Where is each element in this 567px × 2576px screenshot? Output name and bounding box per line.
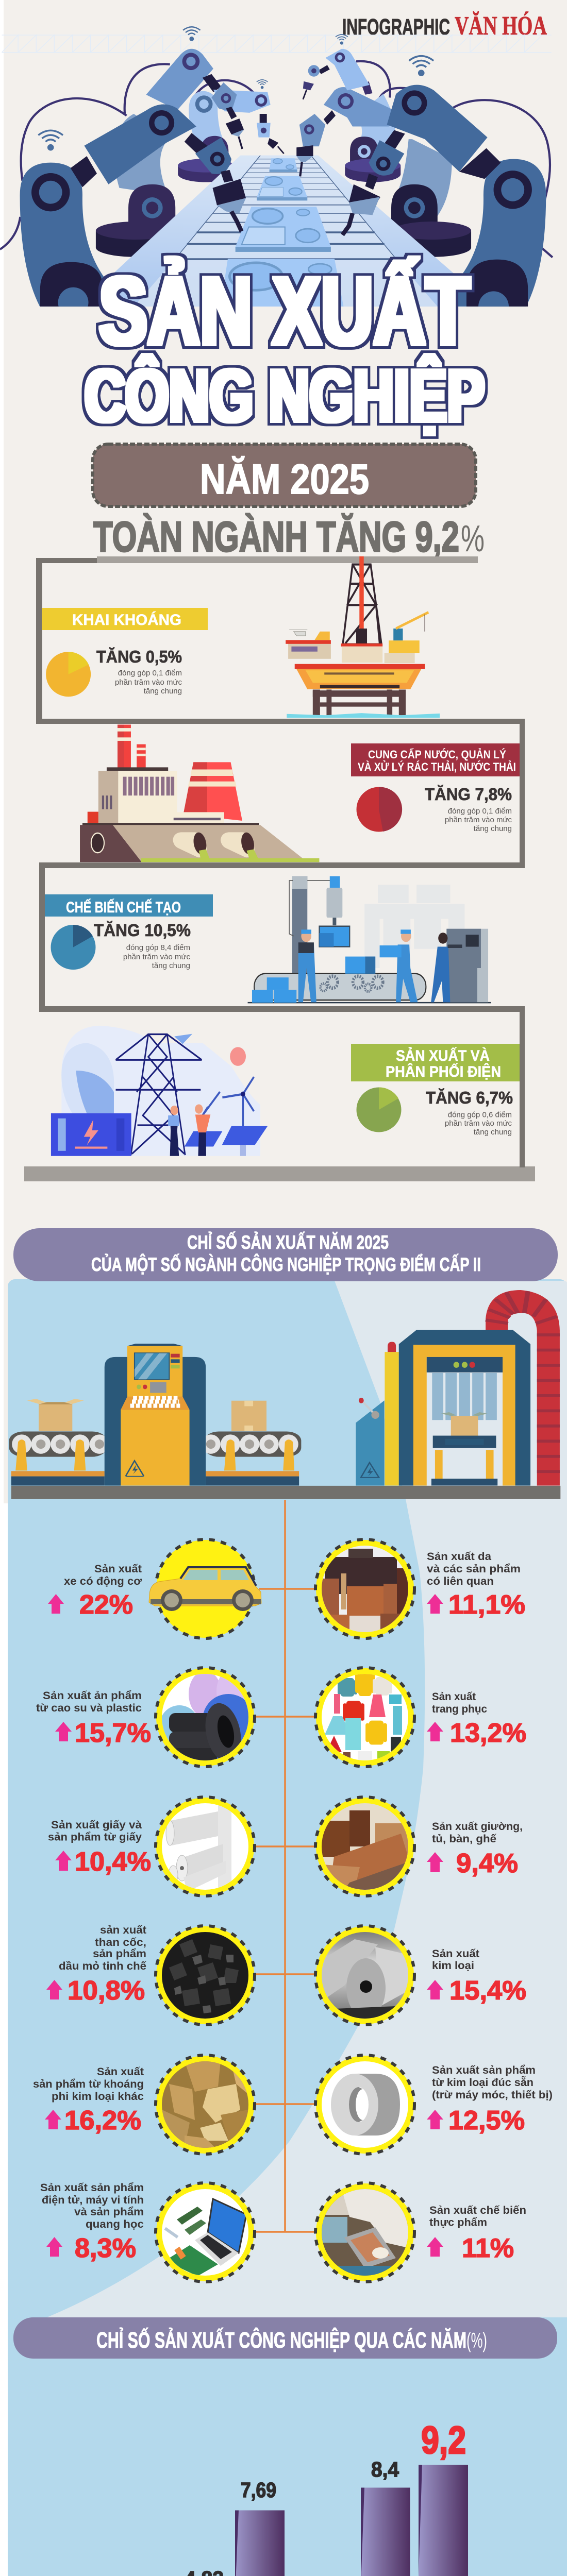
photo substitute: food factory [322, 2189, 408, 2279]
item: coke and petroleum [46, 1924, 255, 2025]
item: non-metallic minerals: 16,2% [64, 2106, 141, 2136]
photo substitute: metal rolls [322, 1932, 408, 2019]
item: furniture: tủ, bàn, ghế [432, 1833, 496, 1845]
stat: mining: đóng góp 0,1 điểm [118, 669, 182, 677]
left conveyor [9, 1432, 301, 1485]
panel: water and waste [80, 724, 520, 862]
stat: electricity [426, 1088, 513, 1137]
bar 2022: 7,69 [241, 2478, 276, 2502]
photo substitute: coal [162, 1932, 248, 2019]
stat: mining: TĂNG 0,5% [96, 647, 182, 666]
item: furniture: 9,4% [456, 1849, 518, 1878]
panel: manufacturing [45, 876, 491, 1003]
photo substitute: clothes [322, 1674, 408, 1760]
item: electronics: 8,3% [75, 2233, 136, 2263]
hero illustration: robot arms over a conveyor [0, 27, 553, 307]
item: non-metallic minerals: phi kim loại khác [52, 2091, 144, 2103]
item: leather: có liên quan [427, 1575, 494, 1587]
photo substitute: paper rolls [162, 1803, 248, 1892]
item: non-metallic minerals: sản phẩm từ khoáng [33, 2078, 144, 2090]
header logo: Infographic Văn Hóa: INFOGRAPHIC [342, 14, 450, 40]
item: coke and petroleum: sản xuất [100, 1924, 146, 1936]
label: mining [42, 608, 208, 630]
bar chart: yearly production index [120, 2418, 468, 2576]
text: xe có động cơ [64, 1575, 142, 1587]
illustration: factory machines on floor [9, 1290, 560, 1499]
heading: 2025 production index: CHỈ SỐ SẢN XUẤT NĂM 2025 [187, 1231, 389, 1253]
text [48, 1563, 142, 1620]
item: electronics: quang học [86, 2218, 144, 2230]
item: paper: Sản xuất giấy và [51, 1819, 142, 1831]
pie: manufacturing [51, 925, 96, 970]
stat: mining: tăng chung [144, 687, 182, 696]
item: rubber and plastic: từ cao su và plastic [36, 1702, 142, 1714]
item: paper [48, 1797, 255, 1896]
stat: electricity: TĂNG 6,7% [426, 1088, 513, 1107]
stair frame [24, 556, 535, 1181]
bar 2025 [419, 2418, 468, 2576]
item: electronics: và sản phẩm [74, 2206, 144, 2218]
item: fabricated metal [315, 2055, 553, 2154]
label: electricity [351, 1044, 520, 1081]
control machine [105, 1344, 206, 1485]
label: water and waste [351, 743, 520, 776]
item: coke and petroleum: dầu mỏ tinh chế [59, 1960, 146, 1972]
stat: mining [96, 647, 182, 696]
item: electronics: điện tử, máy vi tính [42, 2194, 144, 2206]
ceiling truss [2, 35, 552, 53]
icon: factory [80, 724, 319, 862]
item: metals [315, 1926, 526, 2025]
heading: 2025 production index [13, 1228, 558, 1281]
robot cables [0, 61, 553, 257]
text: Sản xuất [94, 1563, 142, 1575]
item: rubber and plastic [36, 1668, 255, 1767]
panel: mining [42, 556, 440, 718]
bar 2022 [235, 2478, 285, 2576]
stat: electricity: phần trăm vào mức [445, 1119, 512, 1128]
top robot tools (centre) [211, 82, 336, 176]
label: manufacturing [45, 894, 213, 917]
floor [11, 1486, 560, 1499]
photo substitute: leather goods [322, 1546, 408, 1632]
label: mining: KHAI KHOÁNG [72, 611, 181, 629]
label: water and waste: CUNG CẤP NƯỚC, QUẢN LÝ [368, 748, 506, 761]
central connector lines [255, 1500, 314, 2232]
item: apparel [315, 1668, 526, 1772]
stat: manufacturing: đóng góp 8,4 điểm [126, 943, 190, 952]
circle [156, 1539, 255, 1638]
item: food processing: thực phẩm [429, 2216, 487, 2229]
pie: water and waste [357, 787, 402, 832]
stat: water and waste [425, 785, 512, 833]
photo substitute: gold ore [162, 2061, 248, 2148]
photo substitute: laptop and circuit board [162, 2189, 248, 2276]
item: electronics [40, 2182, 255, 2282]
item: apparel: Sản xuất [432, 1691, 476, 1703]
item: furniture: Sản xuất giường, [432, 1821, 523, 1833]
item: leather: và các sản phẩm [427, 1563, 521, 1575]
item: metals: 15,4% [449, 1976, 526, 2006]
item: fabricated metal: 12,5% [448, 2106, 525, 2136]
item: rubber and plastic: Sản xuất ản phẩm [43, 1690, 142, 1702]
bar 2024: 8,4 [371, 2458, 399, 2481]
item: coke and petroleum: than cốc, [95, 1937, 146, 1948]
stat: manufacturing: TĂNG 10,5% [94, 921, 191, 940]
photo substitute: steel coil [322, 2061, 408, 2148]
big robot left [20, 104, 246, 307]
item: paper: sản phẩm từ giấy [48, 1831, 142, 1843]
stat: mining: phần trăm vào mức [115, 678, 182, 687]
heading: index over the years: (%) [466, 2328, 487, 2352]
item: leather: 11,1% [448, 1590, 525, 1620]
item: food processing [315, 2183, 526, 2282]
year badge [93, 444, 476, 506]
photo substitute: wooden bed [322, 1803, 411, 1893]
back robot left [96, 49, 234, 257]
cardboard boxes [27, 1399, 266, 1431]
item: fabricated metal: từ kim loại đúc sẵn [432, 2076, 533, 2089]
pie: electricity [357, 1087, 401, 1132]
item: food processing: Sản xuất chế biến [429, 2205, 526, 2216]
icon: oil rig [286, 556, 440, 718]
label: electricity: SẢN XUẤT VÀ [396, 1047, 490, 1064]
stat: electricity: đóng góp 0,6 điểm [448, 1111, 512, 1119]
item: coke and petroleum: 10,8% [68, 1976, 145, 2006]
item: food processing: 11% [462, 2233, 514, 2263]
header logo: Infographic Văn Hóa [342, 11, 547, 41]
headline: whole sector growth: % [461, 518, 485, 560]
label: electricity: PHÂN PHỐI ĐIỆN [386, 1063, 501, 1080]
panel: sector indexes background [8, 1279, 567, 2576]
item: leather: Sản xuất da [427, 1551, 491, 1563]
scanner machine [356, 1330, 530, 1485]
photo substitute: tyres [162, 1674, 248, 1760]
conveyor belt [78, 156, 492, 307]
stat: manufacturing: phần trăm vào mức [123, 953, 190, 961]
label: water and waste: VÀ XỬ LÝ RÁC THẢI, NƯỚC THẢI [358, 760, 516, 773]
item: non-metallic minerals: Sản xuất [97, 2066, 144, 2078]
stat: water and waste: tăng chung [474, 824, 512, 833]
stat: water and waste: TĂNG 7,8% [425, 785, 512, 804]
icon: power tower, battery, wind and solar [51, 1026, 268, 1156]
text: 22% [79, 1590, 133, 1620]
item: coke and petroleum: sản phẩm [93, 1948, 146, 1960]
heading: index over the years [13, 2317, 557, 2359]
icon: wifi signals [38, 27, 433, 151]
item: furniture [315, 1797, 523, 1896]
icon: factory workers and conveyor [248, 876, 491, 1003]
bar 2024 [361, 2458, 410, 2576]
stat: water and waste: đóng góp 0,1 điểm [448, 807, 512, 816]
item: metals: kim loại [432, 1960, 474, 1972]
item: apparel: 13,2% [450, 1718, 526, 1748]
panel: electricity [51, 1026, 520, 1156]
item: electronics: Sản xuất sản phẩm [40, 2182, 144, 2194]
item: metals: Sản xuất [432, 1948, 479, 1960]
item: fabricated metal: Sản xuất sản phẩm [432, 2064, 536, 2076]
item: fabricated metal: (trừ máy móc, thiết bị) [432, 2089, 553, 2101]
stat: manufacturing [94, 921, 191, 970]
stat: manufacturing: tăng chung [152, 961, 190, 970]
item: apparel: trang phục [432, 1703, 487, 1715]
item: leather [315, 1539, 525, 1638]
red hose [486, 1290, 560, 1485]
item: paper: 10,4% [75, 1847, 151, 1877]
stat: water and waste: phần trăm vào mức [445, 816, 512, 824]
item: rubber and plastic: 15,7% [75, 1718, 151, 1748]
icon: yellow car [149, 1567, 261, 1611]
item: motor vehicles [48, 1539, 261, 1638]
item: non-metallic minerals [33, 2055, 255, 2154]
page background [4, 0, 567, 1503]
pie: mining [46, 652, 91, 697]
year badge: NĂM 2025 [200, 456, 369, 503]
stat: electricity: tăng chung [474, 1128, 512, 1137]
back robot right [303, 49, 471, 257]
big robot right [342, 85, 546, 307]
label: manufacturing: CHẾ BIẾN CHẾ TẠO [66, 899, 181, 916]
title [85, 257, 485, 437]
bar 2025: 9,2 [421, 2418, 466, 2462]
